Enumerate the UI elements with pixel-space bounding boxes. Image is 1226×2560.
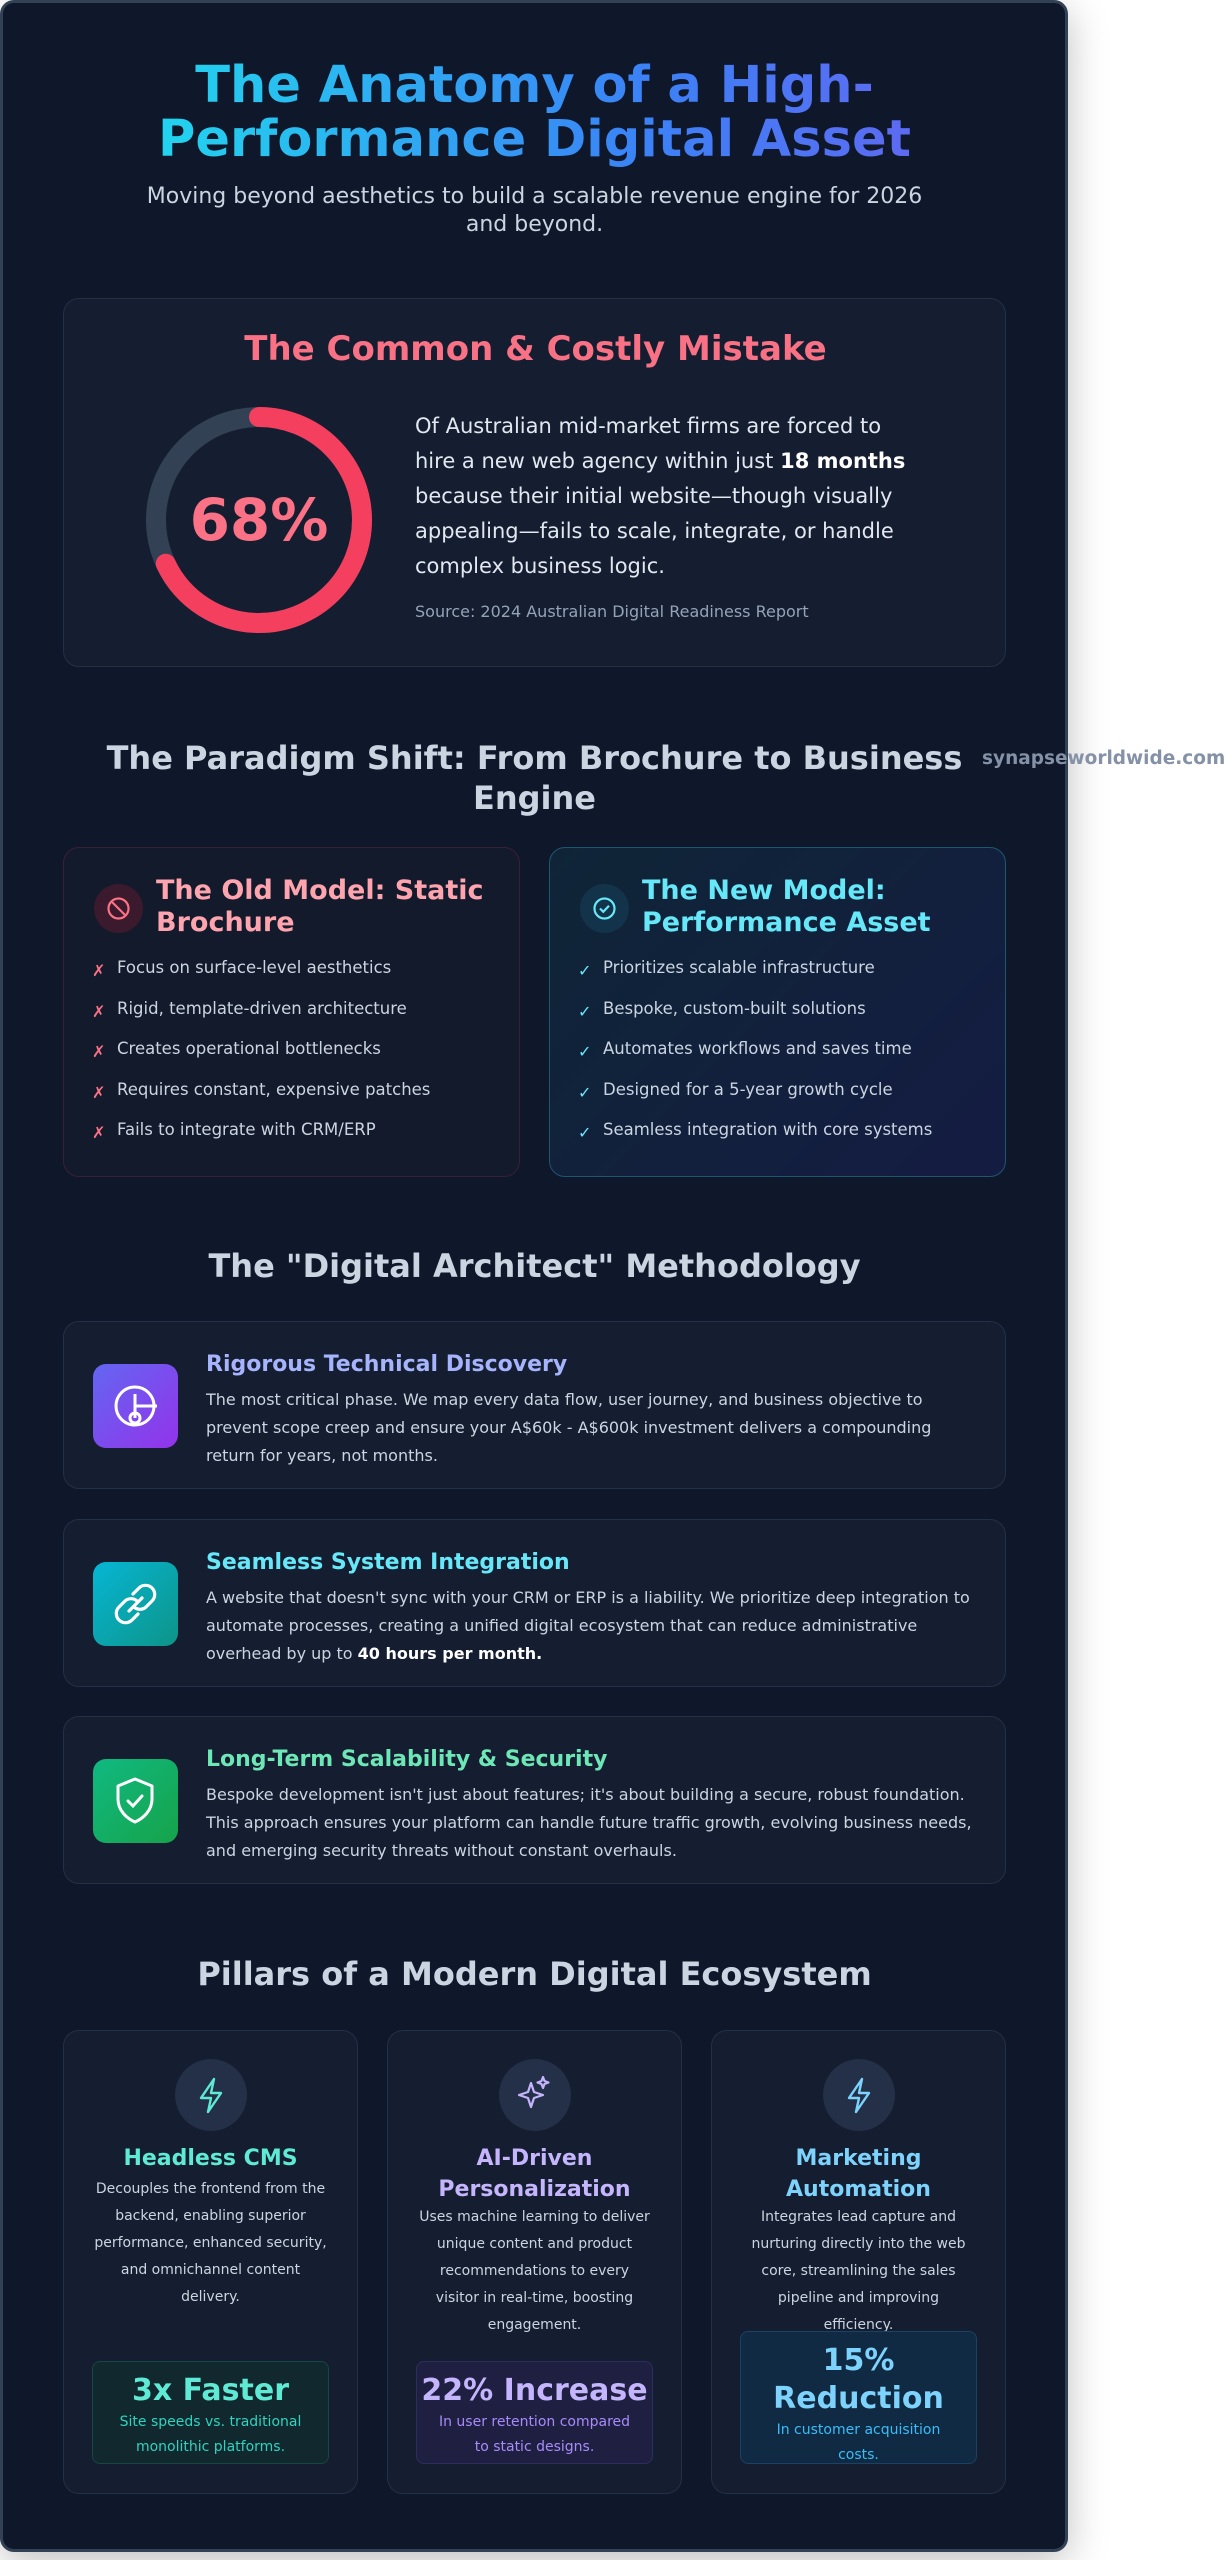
icon: link: [93, 1562, 178, 1646]
old heading: [156, 875, 484, 938]
new list: [578, 958, 932, 1142]
headless desc: Decouples the frontend from the: [96, 2181, 325, 2197]
old list: ✗: [92, 1002, 105, 1021]
watermark: synapseworldwide.com: [982, 748, 1225, 769]
integration text: A website that doesn't sync with your CRM or ERP is a liability. We prioritize deep integration to automate processes, creating a unified digital ecosystem that can reduce administrative overhead by up to 40 hours per month.: [206, 1588, 970, 1663]
new list: Seamless integration with core systems: [603, 1120, 932, 1139]
panel: old model: [63, 847, 520, 1177]
method card: discovery: [63, 1321, 1006, 1489]
new heading: Performance Asset: [642, 907, 931, 938]
ai desc: [419, 2209, 650, 2333]
subtitle: Moving beyond aesthetics to build a scalable revenue engine for 2026 and beyond.: [147, 184, 922, 237]
icon: sparkles: [499, 2059, 571, 2131]
old list: Focus on surface-level aesthetics: [117, 958, 391, 977]
automation title: Marketing: [795, 2146, 922, 2171]
method card: integration: [63, 1519, 1006, 1687]
scalability title: Long-Term Scalability & Security: [206, 1747, 607, 1772]
headless desc: [94, 2181, 327, 2305]
panel: costly mistake: [63, 298, 1006, 667]
automation title: [786, 2146, 931, 2202]
new heading: The New Model:: [642, 875, 886, 906]
donut chart 68%: 68%: [190, 486, 328, 554]
new list: Designed for a 5-year growth cycle: [603, 1080, 893, 1099]
automation desc: [751, 2209, 966, 2333]
automation desc: Integrates lead capture and: [761, 2209, 956, 2225]
title: The Anatomy of a High-: [195, 56, 874, 115]
new list: Automates workflows and saves time: [603, 1039, 912, 1058]
automation desc: pipeline and improving: [778, 2290, 939, 2306]
pillar: ai personalization: [387, 2030, 682, 2494]
new list: ✓: [578, 1123, 591, 1142]
headless desc: delivery.: [181, 2289, 240, 2305]
source: Source: 2024 Australian Digital Readiness Report: [415, 602, 809, 621]
ai desc: engagement.: [488, 2317, 581, 2333]
new list: ✓: [578, 961, 591, 980]
stat: 22% increase: In user retention compared to static designs.: [439, 2414, 630, 2455]
pillar: marketing automation: [711, 2030, 1006, 2494]
mistake text: Of Australian mid-market firms are forced to hire a new web agency within just 18 months because their initial website—though visually appealing—fails to scale, integrate, or handle complex business logic.: [415, 414, 905, 578]
scalability text: Bespoke development isn't just about features; it's about building a secure, robust foundation. This approach ensures your platform can handle future traffic growth, evolving business needs, and emerging security threats without constant overhauls.: [206, 1785, 972, 1860]
icon: discovery: [93, 1364, 178, 1448]
new list: ✓: [578, 1002, 591, 1021]
headless desc: performance, enhanced security,: [94, 2235, 327, 2251]
ai desc: Uses machine learning to deliver: [419, 2209, 650, 2225]
automation desc: nurturing directly into the web: [751, 2236, 966, 2252]
old list: Creates operational bottlenecks: [117, 1039, 381, 1058]
paradigm heading: The Paradigm Shift: From Brochure to Business Engine: [107, 739, 962, 817]
old list: ✗: [92, 1123, 105, 1142]
old list: ✗: [92, 1042, 105, 1061]
automation desc: efficiency.: [824, 2317, 893, 2333]
methodology heading: The "Digital Architect" Methodology: [208, 1247, 861, 1285]
new list: ✓: [578, 1042, 591, 1061]
icon: bolt: [175, 2059, 247, 2131]
stat: 3x faster: [92, 2361, 329, 2464]
ai desc: visitor in real-time, boosting: [436, 2290, 633, 2306]
headless desc: backend, enabling superior: [115, 2208, 306, 2224]
automation desc: core, streamlining the sales: [761, 2263, 956, 2279]
headless title: Headless CMS: [123, 2146, 298, 2171]
old list: Fails to integrate with CRM/ERP: [117, 1120, 376, 1139]
icon: prohibited: [94, 884, 143, 933]
icon: shield: [93, 1759, 178, 1843]
mistake heading: The Common & Costly Mistake: [244, 329, 827, 369]
icon: bolt blue: [823, 2059, 895, 2131]
stat: 3x faster: Site speeds vs. traditional monolithic platforms.: [120, 2414, 301, 2455]
old heading: Brochure: [156, 907, 295, 938]
donut chart 68%: [146, 407, 372, 633]
new list: ✓: [578, 1083, 591, 1102]
ai desc: recommendations to every: [440, 2263, 629, 2279]
panel: new model: [549, 847, 1006, 1177]
pillars heading: Pillars of a Modern Digital Ecosystem: [197, 1955, 872, 1993]
ai desc: unique content and product: [437, 2236, 632, 2252]
icon: check circle: [580, 884, 629, 933]
old list: Rigid, template-driven architecture: [117, 999, 407, 1018]
discovery text: The most critical phase. We map every data flow, user journey, and business objective to prevent scope creep and ensure your A$60k - A$600k investment delivers a compounding return for years, not months.: [206, 1390, 931, 1465]
old list: ✗: [92, 1083, 105, 1102]
method card: scalability: [63, 1716, 1006, 1884]
new list: Bespoke, custom-built solutions: [603, 999, 866, 1018]
headless desc: and omnichannel content: [121, 2262, 300, 2278]
pillar: headless cms: [63, 2030, 358, 2494]
old heading: The Old Model: Static: [156, 875, 484, 906]
integration title: Seamless System Integration: [206, 1550, 570, 1575]
stat: 15% reduction: [740, 2331, 977, 2464]
automation title: Automation: [786, 2177, 931, 2202]
old list: [92, 958, 430, 1142]
new list: Prioritizes scalable infrastructure: [603, 958, 875, 977]
discovery title: Rigorous Technical Discovery: [206, 1352, 567, 1377]
stat: 15% reduction: In customer acquisition costs.: [777, 2422, 940, 2463]
title: Performance Digital Asset: [158, 110, 911, 169]
stat: 15% reduction: 15%: [823, 2343, 894, 2378]
new heading: [642, 875, 931, 938]
ai title: [438, 2146, 631, 2202]
old list: Requires constant, expensive patches: [117, 1080, 430, 1099]
stat: 15% reduction: Reduction: [773, 2381, 944, 2416]
title: [3, 59, 1066, 167]
ai title: Personalization: [438, 2177, 631, 2202]
stat: 22% increase: 22% Increase: [421, 2373, 648, 2408]
stat: 22% increase: [416, 2361, 653, 2464]
stat: 3x faster: 3x Faster: [132, 2373, 289, 2408]
ai title: AI-Driven: [477, 2146, 592, 2171]
old list: ✗: [92, 961, 105, 980]
